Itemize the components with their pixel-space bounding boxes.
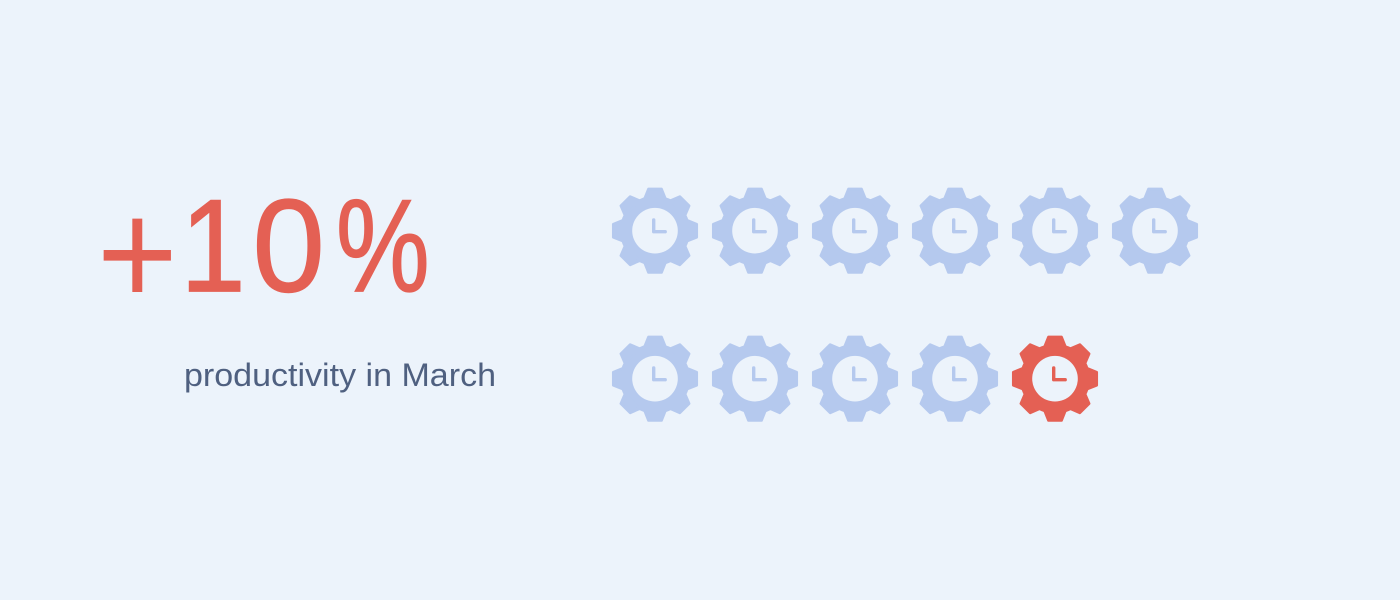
headline: +10% xyxy=(97,169,430,337)
icon row 1: six blue clock gears xyxy=(613,189,1197,272)
headline: +10%: % xyxy=(336,173,430,320)
headline: +10%: 0 xyxy=(252,171,325,319)
caption: productivity in March: productivity in March xyxy=(184,357,496,393)
headline: +10%: 1 xyxy=(180,173,246,320)
icon row 2: four blue clock gears and one red xyxy=(613,337,1097,421)
headline: +10%: + xyxy=(97,169,178,337)
